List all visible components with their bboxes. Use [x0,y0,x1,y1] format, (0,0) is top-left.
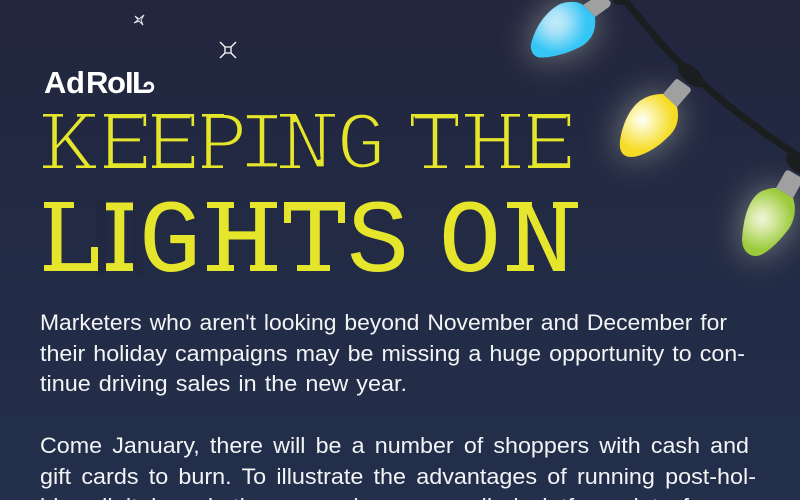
second paragraph: Come January, there will be a number of shoppers with cash and [40,433,749,458]
intro paragraph: their holiday campaigns may be missing a huge opportunity to con- [40,341,745,366]
bulb: green [742,170,800,256]
wire [613,0,800,178]
intro paragraph [40,310,745,396]
bulb glows [531,2,795,256]
title: Keeping the: KEEPING THE [44,99,574,193]
icon: small sparkle star [134,15,144,25]
title: Lights on: LIGHTS ON [40,185,573,303]
bulb: yellow [620,79,691,157]
logo: AdRoll: AdRoIL [44,65,151,100]
second paragraph: gift cards to burn. To illustrate the advantages of running post-hol- [40,464,756,489]
icon: large sparkle star [220,42,236,58]
intro paragraph: Marketers who aren't looking beyond November and December for [40,310,727,335]
second paragraph [40,433,756,500]
bulb: blue [531,0,611,58]
intro paragraph: tinue driving sales in the new year. [40,371,407,396]
string lights [531,0,800,256]
